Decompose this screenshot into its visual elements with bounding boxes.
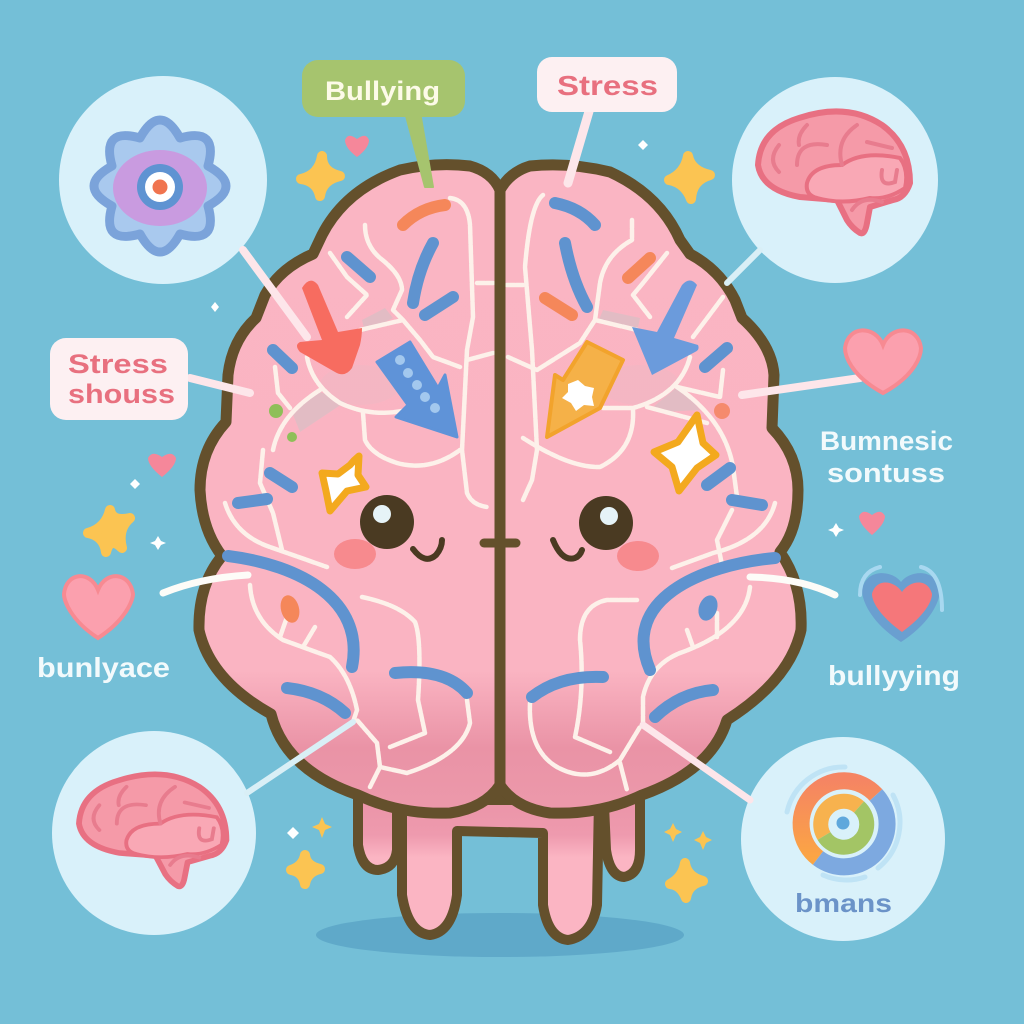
- blue strokes: [228, 203, 775, 717]
- label: Bumnesic sontuss: Bumnesic: [820, 426, 953, 456]
- right face: [553, 496, 659, 571]
- small pink hearts: [148, 136, 885, 535]
- circle: brain icon bottom left: [52, 731, 256, 935]
- icon: heart in blue outline: [860, 567, 942, 642]
- left hemisphere: [199, 165, 500, 813]
- icon: right sparkle: [654, 415, 716, 491]
- label: bunlyace: bunlyace: [37, 652, 170, 683]
- label: bullyying: bullyying: [828, 660, 960, 691]
- label: Stress shouss: shouss: [68, 379, 175, 409]
- ring outer halos: [787, 767, 900, 880]
- orange bean: [278, 593, 302, 625]
- icon: left sparkle: [322, 456, 366, 511]
- label: Stress shouss: Stress: [68, 349, 168, 379]
- white sparkles: [130, 140, 844, 839]
- label: bmans: bmans: [795, 888, 892, 918]
- small yellow sparkles: [312, 817, 712, 850]
- ring outer segments: [801, 781, 887, 867]
- label: Bumnesic sontuss: sontuss: [827, 458, 945, 488]
- label: Stress: Stress: [557, 70, 658, 101]
- arrow: red: [297, 281, 362, 374]
- arrow: orange: [547, 342, 623, 437]
- arrow: blue left: [377, 342, 457, 437]
- label: Bumnesic sontuss: [820, 426, 953, 488]
- connector lines: [163, 250, 860, 800]
- center divider: [484, 185, 516, 790]
- brain legs: [358, 790, 640, 940]
- blue bean: [695, 593, 721, 623]
- left face: [334, 495, 442, 569]
- label: Bullying: Bullying: [325, 76, 440, 106]
- ring center: [836, 816, 850, 830]
- orange strokes: [403, 205, 650, 315]
- circle: ring chart: [741, 737, 945, 941]
- ground shadow: [316, 913, 684, 957]
- decorative yellow stars: [88, 156, 710, 898]
- soft shaded patches: [292, 308, 700, 432]
- label: Stress: [537, 57, 677, 183]
- brain body: [199, 165, 801, 813]
- small green and orange dots: [269, 403, 730, 442]
- circle: brain icon top right: [732, 77, 938, 283]
- label: Stress shouss: [50, 338, 188, 420]
- label: Bullying: [302, 60, 465, 187]
- brain fold lines: [225, 195, 775, 790]
- circle: flower icon: [59, 76, 267, 284]
- icon: heart left: [64, 576, 133, 638]
- ring inner segments: [821, 801, 867, 847]
- icon: heart right: [845, 330, 921, 393]
- arrow: blue right: [632, 280, 699, 375]
- right hemisphere: [500, 165, 801, 813]
